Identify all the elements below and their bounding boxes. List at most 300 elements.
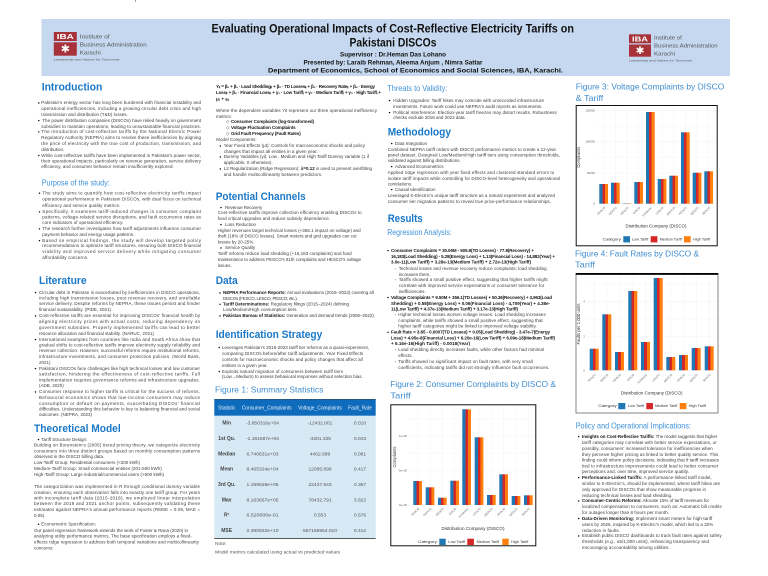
text block: literature bullets: government subsidies. Properly implemented tariffs can lead to better <box>39 325 201 330</box>
text block: tariff structure design: The categorization was implemented in R through conditional dummy variable <box>34 484 200 489</box>
text block: literature bullets: Behavioral economics shows that low-income consumers may reduce <box>39 395 200 400</box>
table: summary statistics: 6.740631e+03 <box>246 451 279 457</box>
bar chart: voltage complaints: SEPCO <box>701 205 712 216</box>
panel: theoretical model <box>34 423 201 550</box>
bar chart: fault rates: PESCO <box>676 372 687 383</box>
text block: model description: and handle multicollinearity between predictors. <box>224 172 322 177</box>
text block: purpose bullets: patterns, voltage-related service disruptions, and fault occurrence rates as <box>42 214 202 220</box>
text block: introduction bullets: efficiency, and consumer behavior remain insufficiently explored. <box>41 164 174 169</box>
bar chart: fault rates <box>576 273 718 413</box>
text block: purpose bullets: The research further investigates how tariff adjustments influence consumer <box>42 226 201 231</box>
logo: IBA left: Institute of <box>80 35 110 41</box>
supervisor and authors <box>268 52 563 74</box>
table: summary statistics: 8.163657e+05 <box>246 497 279 503</box>
bar chart: consumer complaints: 5e+05 <box>399 468 407 472</box>
text block: introduction bullets: subsidies to maintain operations, leading to unsustainable financial practices. <box>41 124 201 129</box>
text block: threats bullets: investments. Future work could use NEPRA's audit reports as instruments. <box>393 104 542 109</box>
table: summary statistics: 0.412 <box>354 528 366 534</box>
text block: econometric specification <box>34 522 200 550</box>
text block: introduction bullets: the price of electricity with the true cost of production, transmission, and <box>41 141 201 146</box>
bar chart: voltage complaints: LESCO <box>655 205 665 216</box>
bar chart: fault rates: Faults per 1,000 units <box>576 304 581 344</box>
panel: policy and operational implications <box>576 421 722 550</box>
legend <box>603 236 711 242</box>
text block: introduction bullets: While cost-reflective tariffs have been implemented in Pakistan's power sector, <box>41 153 201 158</box>
text block: policy bullets: reducing technical losses and load shedding. <box>582 493 672 498</box>
bar chart: fault rates: Distribution Company (DISCO) <box>621 390 683 396</box>
heading: figure 2: Tariff <box>390 391 411 401</box>
logo: IBA left: Business Administration <box>80 43 147 49</box>
table: summary statistics: 1st Qu. <box>218 436 236 442</box>
text block: tariff structure design: High-Tariff Group: Large industrial/commercial users (>500 kWh) <box>34 472 164 477</box>
panel: figure 4 fault rates <box>575 249 718 413</box>
bar chart: fault rates: QESCO <box>688 372 699 383</box>
table: summary statistics: 8.465324e+04 <box>246 467 279 473</box>
text block: voltage complaints regression: complaints, while tariffs showed a small positive effect, suggesting that <box>398 318 543 323</box>
table: summary statistics: 0.676 <box>354 513 366 519</box>
text block: methodology details <box>388 141 560 204</box>
text block: purpose bullets: payment behavior and energy usage patterns. <box>42 232 134 237</box>
heading: potential channels: Potential Channels <box>216 191 306 203</box>
bar chart: voltage complaints: K-Electric <box>641 205 653 217</box>
text block: consumer complaints regression: Consumer Complaints = 30.06M - 505.9(TD Losses) - 77.8(Recovery) + <box>391 248 534 253</box>
text block: methodology details: Applied ridge regression with year fixed effects and clustered standard errors to <box>388 170 555 175</box>
text block: introduction bullets <box>38 100 202 169</box>
bar chart: consumer complaints: 1e+06 <box>399 434 407 438</box>
text block: fault rate regression: ◦ <box>395 359 397 364</box>
text block: literature bullets: (ADB, 2020) <box>39 383 64 388</box>
legend <box>598 403 707 409</box>
table: summary statistics: 1.199628e+05 <box>246 482 279 488</box>
legend: High Tariff <box>511 540 529 544</box>
text block: voltage complaints regression: higher tariff categories might be linked to improved voltage stability. <box>398 324 537 328</box>
text block: econometric specification: Econometric Specification: <box>41 522 96 526</box>
table note: Note: <box>215 541 227 547</box>
table: summary statistics: -12432.001 <box>308 421 333 427</box>
text block: fault rate regression: + 6.16e-16(High Tariff) - 0.0018(Year) <box>391 341 470 346</box>
text block: econometric specification: analyzing utility performance metrics. The base specification employs a fixed- <box>34 534 192 538</box>
supervisor and authors: Presented by: Laraib Rehman, Aleema Anjum , Nimra Sattar <box>304 60 483 66</box>
logo: IBA left: IBA <box>57 32 74 41</box>
bar chart: consumer complaints: QESCO <box>508 506 519 517</box>
logo: IBA left: Leadership and Values for Tomorrow <box>54 58 121 62</box>
text block: identification bullets <box>219 345 369 379</box>
text block: fault rate regression: Tariffs showed no significant impact on fault rates, with very small <box>398 359 533 364</box>
text block: identification bullets: entities in a given year. <box>222 363 268 368</box>
text block: consumer complaints regression: ◦ <box>395 277 397 282</box>
text block: literature bullets: Cost-reflective tariffs are essential for improving DISCOs' financial health by <box>39 313 201 318</box>
legend: Low Tariff <box>628 404 645 408</box>
text block: model description: ◇ <box>226 125 230 130</box>
text block: model description: Consumer Complaints (log-transformed) <box>231 119 314 124</box>
text block: policy bullets: Performance-Linked Tariffs: A performance-linked tariff model, <box>582 475 712 480</box>
logo: IBA left <box>54 32 147 62</box>
text block: methodology details: Advanced Econometrics <box>395 164 444 169</box>
text block: tariff structure design: with incomplete tariff data (2015-2018), we employed linear interpolation <box>34 496 200 500</box>
bar chart: consumer complaints: HESCO <box>435 506 445 517</box>
text block: econometric specification: effects ridge regression to address both temporal variations and multicollinearity <box>34 540 200 544</box>
text block: data sources <box>219 290 375 318</box>
text block: fault rate regression: Fault Rate = 3.85 - 0.0007(TD Losses) + 0.05(Load Shedding) - 3.47e-7(Energy <box>391 330 550 334</box>
text block: channels list: maintenance to address PESCO's 81th complaints and HESCO's voltage <box>218 257 361 262</box>
table: summary statistics: Mean <box>220 467 233 473</box>
panel: data <box>216 275 375 318</box>
legend: Category <box>418 540 437 544</box>
logo: IBA right: ✱ <box>636 45 645 57</box>
text block: policy bullets: perceptions and, over time, improved service quality. <box>582 469 689 474</box>
heading: data: Data <box>216 275 239 287</box>
bar chart: consumer complaints: LESCO <box>472 506 482 517</box>
text block: data sources: Pakistan Bureau of Statistics: Generation and demand trends (2006–2022). <box>223 313 375 318</box>
bar chart: consumer complaints: PESCO <box>496 506 507 517</box>
supervisor and authors: Supervisor : Dr.Heman Das Lohano <box>340 52 446 58</box>
text block: channels list: Loss Reduction <box>225 222 257 227</box>
text block: literature bullets: satisfaction, hindering the effectiveness of cost-reflective tariffs. Full <box>39 372 200 376</box>
logo: IBA right: IBA <box>632 34 649 43</box>
text block: introduction bullets: transmission and distribution (T&D) losses. <box>41 112 128 117</box>
heading: figure 4: Tariff <box>575 260 596 270</box>
bar chart: voltage complaints: IESCO <box>632 205 642 215</box>
text block: channels list: fund critical upgrades and reduce subsidy dependence. <box>218 216 330 221</box>
text block: methodology details: Leveraged K-Electric's unique tariff structure as a natural experiment and analyzed <box>388 193 555 198</box>
heading: figure 3: & Tariff <box>576 93 604 103</box>
text block: policy bullets: thresholds (e.g., ≤5/1,000 units), enhancing transparency and <box>582 539 709 544</box>
bar chart: voltage complaints: MEPCO <box>666 205 677 216</box>
text block: model description: ◇ <box>226 119 230 124</box>
table: summary statistics: 4462.689 <box>310 451 330 457</box>
text block: policy bullets: finding could inform policy decisions, indicating that if tariff increases <box>582 458 720 462</box>
bar chart: fault rates: MEPCO <box>663 372 674 383</box>
text block: policy bullets: only approved for DISCOs that show measurable progress in <box>582 487 706 492</box>
text block: data sources: DISCOs (FESCO, LESCO, PESCO, etc.). <box>223 296 298 301</box>
text block: model description: Where the dependent variables Yit represent our three operational inefficiency <box>216 108 378 113</box>
text block: purpose bullets: efficiency and service quality metrics. <box>42 203 120 208</box>
table: summary statistics: 587166554.010 <box>303 528 337 534</box>
text block: purpose bullets: core indicators of operational efficiency. <box>42 220 123 225</box>
bar chart: consumer complaints: Distribution Company (DISCO) <box>442 526 505 531</box>
text block: literature bullets: International examples from countries like India and South Africa show that <box>39 337 201 342</box>
heading: introduction: Introduction <box>42 82 103 94</box>
table: summary statistics: 3.822 <box>354 497 366 503</box>
panel: identification strategy <box>216 329 369 379</box>
equation <box>216 84 381 102</box>
text block: purpose bullets: Based on empirical findings, the study will develop targeted policy <box>42 238 202 243</box>
heading: regression analysis: Regression Analysis: <box>387 228 452 237</box>
bar chart: consumer complaints: GEPCO <box>422 506 433 517</box>
text block: introduction bullets: Regulatory Authority (NEPRA) aims to resolve these inefficiencies by aligning <box>41 135 201 140</box>
text block: voltage complaints regression: ◦ <box>395 312 397 317</box>
text block: model description: metrics: <box>216 114 232 119</box>
bar chart: consumer complaints: IESCO <box>448 506 458 516</box>
bar chart: consumer complaints: K-Electric <box>458 506 470 518</box>
text block: policy bullets: Consumer-Centric Reforms: Allocate 15% of tariff revenues for <box>582 498 710 503</box>
text block: literature bullets: Circular debt in Pakistan is exacerbated by inefficiencies in DISCO operations, <box>39 290 200 295</box>
text block: model description: changes that impact all entities in a given year. <box>224 149 318 154</box>
text block: literature bullets: resource allocation and financial stability. (NARUC, 2021) <box>39 331 154 336</box>
table: summary statistics: 0.010 <box>354 421 366 427</box>
text block: tariff structure design <box>34 437 201 518</box>
table note <box>215 541 341 555</box>
text block: voltage complaints regression: 11(Low Tariff) + 4.37e-13(Medium Tariff) + 3.17e-13(High Tariff) <box>391 306 518 312</box>
text block: methodology details: panel dataset. Designed Low/Medium/High tariff tiers using consumption thresholds, <box>388 152 560 158</box>
text block: threats bullets: checks exclude 2018 and 2023 data. <box>393 115 466 120</box>
table: summary statistics: 22437.943 <box>308 482 332 488</box>
panel: model equation <box>216 84 381 177</box>
table: summary statistics: -3.850316e+04 <box>246 421 279 427</box>
bar chart: voltage complaints: GEPCO <box>607 205 618 216</box>
text block: literature bullets: consumption or default on payments, exacerbating DISCOs' financial <box>39 401 200 406</box>
text block: voltage complaints regression: Higher technical losses worsen voltage issues. Load shedding increases <box>398 312 546 317</box>
text block: literature bullets: outcomes. (NEPRA, 2023) <box>39 412 93 417</box>
text block: fault rate regression <box>387 330 556 370</box>
heading: methodology: Methodology <box>388 126 452 138</box>
bar chart: fault rates: LESCO <box>651 372 661 383</box>
table: summary statistics: -1.181587e+04 <box>246 436 279 442</box>
text block: fault rate regression: Loss) + 4.95e-8(Financial Loss) + 6.20e-16(Low Tariff) + 6.09e-18(Medium Tariff) <box>391 336 556 340</box>
bar chart: consumer complaints: SEPCO <box>521 506 531 517</box>
panel: methodology <box>388 126 560 204</box>
heading: literature: Literature <box>39 275 87 287</box>
bar chart: voltage complaints: PESCO <box>678 205 688 216</box>
text block: channels list: Cost-reflective tariffs improve collection efficiency enabling DISCOs to <box>218 210 362 215</box>
text block: model description: Voltage Fluctuation Complaints <box>231 125 296 130</box>
table: summary statistics: 12085.898 <box>308 467 332 473</box>
bar chart: fault rates: FESCO <box>587 372 597 383</box>
text block: policy bullets: they perceive higher pricing as linked to better quality service. This <box>582 452 719 457</box>
text block: methodology details: Combined NEPRA tariff orders with DISCO performance metrics to create a 12-year <box>388 147 556 152</box>
table: summary statistics: Max <box>222 497 232 503</box>
text block: threats bullets <box>389 98 557 120</box>
text block: policy bullets: Establish public DISCO dashboards to track fault rates against safety <box>582 533 722 538</box>
logo: IBA right: Institute of <box>654 36 682 42</box>
text block: data sources: Tariff Determinations: Regulatory filings (2015–2024) defining <box>223 302 349 306</box>
text block: policy bullets <box>578 434 722 550</box>
title <box>212 22 574 49</box>
text block: channels list: Higher revenues target technical losses (+356.1 impact on voltage) and <box>218 228 361 233</box>
text block: tariff structure design: estimates against NEPRA's annual performance reports (RMSE = 0.08, MAE = <box>34 507 200 512</box>
text block: policy bullets: similar to K-Electric's, should be implemented, where tariff hikes are <box>582 481 720 486</box>
text block: channels list: Service Quality <box>225 245 256 250</box>
text block: introduction bullets: The introduction of cost-reflective tariffs by the National Electric Power <box>41 129 201 134</box>
text block: voltage complaints regression: Voltage Complaints = 9.50M + 356.1(TD Losses) + 50.36(Recovery) + 3,963(Load <box>391 295 552 300</box>
bar chart: fault rates: HESCO <box>612 372 623 383</box>
text block: channels list: theft (18% of DISCO losses). Smart meters and grid upgrades can cut <box>218 234 357 238</box>
panel: potential channels <box>216 191 362 268</box>
text block: model description: ◇ <box>226 131 230 136</box>
panel: figure 2 consumer complaints <box>390 379 556 546</box>
table: summary statistics: 0.367 <box>354 482 366 488</box>
text block: literature bullets: including high transmission losses, poor revenue recovery, and unreliable <box>39 296 200 300</box>
text block: fault rate regression: effects. <box>398 353 413 358</box>
equation: Yᵢₜ = β₀ + β₁ · Load Sheddingᵢₜ + β₂ · TD Lossesᵢₜ + β₃ · Recovery Rateᵢₜ + β₄ · Energy <box>216 84 375 89</box>
text block: identification bullets: Leverages Pakistan's 2015-2023 tariff tier reforms as a quasi-experiment, <box>222 345 369 350</box>
legend: Medium Tariff <box>655 404 678 408</box>
text block: literature bullets: revenue collection. However, successful reforms require institutional reforms, <box>39 348 200 353</box>
logo: IBA left: Karachi <box>80 51 101 57</box>
text block: identification bullets: (Low→Medium) to assess behavioral responses without selection bias. <box>222 374 363 379</box>
logo: IBA right: Leadership and Values for Tomorrow <box>629 58 693 62</box>
equation: Lossᵢₜ + β₅ · Financial Lossᵢₜ + γ₁ · Low Tariffᵢ + γ₂ · Medium Tariffᵢ + γ₃ · High Tariffᵢ + <box>216 90 381 95</box>
heading: policy and operational implications: Policy and Operational Implications: <box>576 421 691 430</box>
bar chart: voltage complaints: FESCO <box>596 205 607 216</box>
text block: identification bullets: comparing DISCOs before/after tariff adjustments. Year Fixed Effects <box>222 351 364 356</box>
table: summary statistics: 0.043 <box>354 436 366 442</box>
text block: literature bullets: financial sustainability. (PIDE, 2021) <box>39 307 112 312</box>
text block: introduction bullets: operational inefficiencies, including a growing circular debt crisis and high <box>41 106 201 111</box>
bar chart: consumer complaints: 0e+00 <box>399 503 407 507</box>
supervisor and authors: Department of Economics, School of Economics and Social Sciences, IBA, Karachi. <box>268 68 563 74</box>
table: summary statistics: 2.390822e+10 <box>246 528 279 534</box>
text block: channels list <box>218 205 362 268</box>
bar chart: fault rates: IESCO <box>626 372 636 382</box>
legend: Medium Tariff <box>660 238 683 242</box>
text block: purpose bullets: Specifically, it examines tariff-induced changes in consumer complaint <box>42 209 202 214</box>
text block: tariff structure design: Tariff Structure Design: <box>41 437 87 442</box>
table: summary statistics: 3rd Qu. <box>218 482 236 488</box>
text block: voltage complaints regression: Shedding) + 0.58(Energy Loss) + 0.06(Financial Loss) - 4,709(Year) + 4.38e- <box>391 301 550 306</box>
header banner <box>42 19 730 76</box>
text block: introduction bullets: The power distribution companies (DISCOs) have relied heavily on government <box>42 118 202 123</box>
text block: policy bullets: Data-Driven Monitoring: Implement smart meters for high-tariff <box>582 516 713 521</box>
text block: introduction bullets: distribution. <box>41 147 64 152</box>
text block: methodology details: isolate tariff impacts while controlling for DISCO-level heterogeneity and operational <box>388 176 560 181</box>
table: summary statistics: 0.553 <box>314 513 326 519</box>
bar chart: fault rates: SEPCO <box>702 372 712 383</box>
bar chart: voltage complaints: QESCO <box>689 205 700 216</box>
panel: introduction <box>38 82 202 260</box>
panel: threats to validity <box>387 84 557 120</box>
text block: consumer complaints regression: correlate with improved service expectations or consumer tolerance for <box>399 283 545 288</box>
text block: model description <box>216 108 378 177</box>
panel: figure 3 voltage complaints <box>576 82 725 246</box>
bar chart: voltage complaints: 50000 <box>587 171 595 175</box>
text block: literature bullets: 2021) <box>39 360 51 365</box>
heading: results: Results <box>388 213 423 225</box>
heading: figure 4 <box>575 249 699 270</box>
panel: literature <box>35 275 201 417</box>
text block: consumer complaints regression: ◦ <box>395 266 397 271</box>
heading: threats to validity: Threats to Validity: <box>387 84 447 93</box>
text block: consumer complaints regression: Technical losses and revenue recovery reduce complaints; load shedding <box>399 266 547 271</box>
table: summary statistics: Fault_Rate <box>348 405 372 411</box>
text block: econometric specification: Our panel regression framework extends the work of Foster & Rana (2020) in <box>34 528 188 533</box>
text block: purpose bullets: viability and improved service delivery while mitigating consumer <box>42 249 201 254</box>
text block: purpose bullets: operational performance in Pakistani DISCOs, with dual focus on technical <box>42 196 201 202</box>
table: summary statistics: 0.081 <box>354 451 366 457</box>
text block: purpose bullets: The study aims to quantify how cost-reflective electricity tariffs impact <box>42 190 202 196</box>
text block: econometric specification: concerns: <box>34 546 54 550</box>
text block: policy bullets: possibly, consumers' increased tolerance for inefficiencies when <box>582 446 713 451</box>
text block: policy bullets: Insights on Cost-Reflective Tariffs: The model suggests that higher <box>582 434 718 439</box>
text block: methodology details: Data Integration <box>395 141 428 146</box>
text block: tariff structure design: consumers into three distinct groups based on monthly consumption patterns <box>34 448 201 454</box>
text block: channels list: losses by 20-25%. <box>218 240 254 244</box>
heading: purpose of the study: Purpose of the study: <box>42 179 110 188</box>
text block: model description: Model Components: <box>216 137 257 142</box>
panel: results <box>387 213 556 370</box>
heading: figure 2 <box>390 379 556 401</box>
text block: consumer complaints regression <box>387 248 555 294</box>
logo: IBA right <box>629 34 718 62</box>
text block: threats bullets: Hidden Upgrades: Tariff hikes may coincide with unrecorded infrastructure <box>393 98 544 103</box>
text block: model description: Grid Fault Frequency (Fault Rates) <box>231 131 301 136</box>
text block: purpose bullets: recommendations to optimize tariff structures, ensuring both DISCO financial <box>42 243 201 248</box>
equation: μₜ + εᵢₜ <box>216 96 230 102</box>
table: summary statistics: 0.417 <box>354 467 366 473</box>
heading: figure 3: Figure 3: Voltage Complaints by DISCO <box>576 82 725 92</box>
text block: introduction bullets: their operational impacts, particularly on revenue generation, service delivery <box>41 158 202 164</box>
text block: fault rate regression: ◦ <box>395 347 397 352</box>
table: summary statistics: 78432.791 <box>308 497 332 503</box>
text block: model description: L2 Regularization (Ridge Regression): λ=0.12 is used to prevent overfitting <box>224 166 372 171</box>
text block: literature bullets: gradual shifts to cost-reflective tariffs improve electricity supply reliability and <box>39 342 200 348</box>
text block: literature bullets: service delivery. Despite reforms by NEPRA, these issues persist and hinder <box>39 301 200 306</box>
text block: methodology details: consumer tier migration patterns to reveal true price-performance relationships. <box>388 199 551 204</box>
legend: Low Tariff <box>448 540 466 544</box>
table: summary statistics <box>214 399 376 539</box>
text block: purpose bullets <box>39 190 202 260</box>
heading: figure 1: Figure 1: Summary Statistics <box>215 385 323 395</box>
text block: literature bullets: implementation requires governance reforms and infrastructure upgrades. <box>39 378 200 382</box>
table: summary statistics: -3201.325 <box>309 436 331 442</box>
text block: methodology details: Causal Identification <box>395 187 436 192</box>
bar chart: consumer complaints: MEPCO <box>483 506 494 517</box>
text block: consumer complaints regression: increases them. <box>399 272 430 277</box>
text block: tariff structure design: between the 2018 and 2021 anchor points, subsequently validating these <box>34 501 200 506</box>
text block: literature bullets: difficulties. Understanding this behavior is key to balancing financial and social <box>39 406 200 412</box>
title: Pakistani DISCOs <box>350 36 436 49</box>
bar chart: voltage complaints: Distribution Company (DISCO) <box>626 224 687 228</box>
bar chart: voltage complaints: HESCO <box>619 205 630 216</box>
text block: fault rate regression: coefficients, indicating tariffs did not strongly influence fault occurrences. <box>398 365 549 370</box>
panel: figure 1 summary statistics <box>214 385 376 555</box>
text block: threats bullets: Political Interference: Election-year tariff freezes may distort results. Robustness <box>393 110 557 115</box>
legend: Category <box>603 238 621 242</box>
bar chart: voltage complaints: 100000 <box>585 140 595 144</box>
table: summary statistics: Median <box>218 451 235 457</box>
text block: consumer complaints regression: 16,183(Load Shedding) - 5.28(Energy Loss) + 1.13(Financial Loss) - 14,882(Year) + <box>391 254 555 259</box>
text block: identification bullets: Exploits natural migration of consumers between tariff tiers <box>222 369 344 374</box>
text block: data sources: NEPRA Performance Reports: Annual evaluations (2015–2023) covering all <box>223 290 374 295</box>
bar chart: voltage complaints: Complaints <box>576 147 581 168</box>
text block: channels list: Tariff reforms reduce load shedding (+16,183 complaints) and fund <box>218 251 352 256</box>
text block: tariff structure design: Building on Borenstein's (2005) tiered pricing theory, we categorize electricity <box>34 442 201 448</box>
logo: IBA right: Karachi <box>654 51 675 57</box>
text block: methodology details: validated against billing distributions. <box>388 158 461 163</box>
bar chart: consumer complaints: FESCO <box>410 506 421 517</box>
text block: literature bullets: Consumer response to higher tariffs is critical for the success of reforms. <box>39 389 200 394</box>
bar chart: fault rates: 2 <box>583 334 585 338</box>
bar chart: fault rates: 0 <box>583 368 585 372</box>
text block: policy bullets: encouraging accountability among utilities. <box>582 545 670 550</box>
text block: model description: applicable, 0 otherwise). <box>224 160 273 165</box>
text block: policy bullets: users by 2026, inspired by K-Electric's model, which led to a 32% <box>582 522 713 527</box>
text block: model description: Year Fixed Effects (μt): Controls for macroeconomic shocks and policy <box>224 143 366 148</box>
table: summary statistics: MSE <box>221 528 233 534</box>
text block: identification bullets: controls for macroeconomic shocks and policy changes that affect all <box>222 357 363 362</box>
text block: data sources: Low/Medium/High consumption tiers. <box>223 307 298 312</box>
table: summary statistics: R² <box>224 513 230 519</box>
text block: channels list: issues. <box>218 263 232 268</box>
text block: tariff structure design: Medium-Tariff Group: Small commercial entities (201-500 kWh) <box>34 466 162 471</box>
bar chart: fault rates: K-Electric <box>636 372 648 384</box>
text block: introduction bullets: Pakistan's energy sector has long been burdened with financial instability and <box>41 100 201 105</box>
title: Evaluating Operational Impacts of Cost-Reflective Electricity Tariffs on <box>212 22 574 35</box>
heading: identification strategy: Identification Strategy <box>216 329 323 341</box>
text block: literature bullets: aligning electricity prices with actual costs, reducing dependency on <box>39 319 200 324</box>
heading: figure 3 <box>576 82 725 103</box>
table: summary statistics: Consumer_Complaints <box>242 405 292 411</box>
